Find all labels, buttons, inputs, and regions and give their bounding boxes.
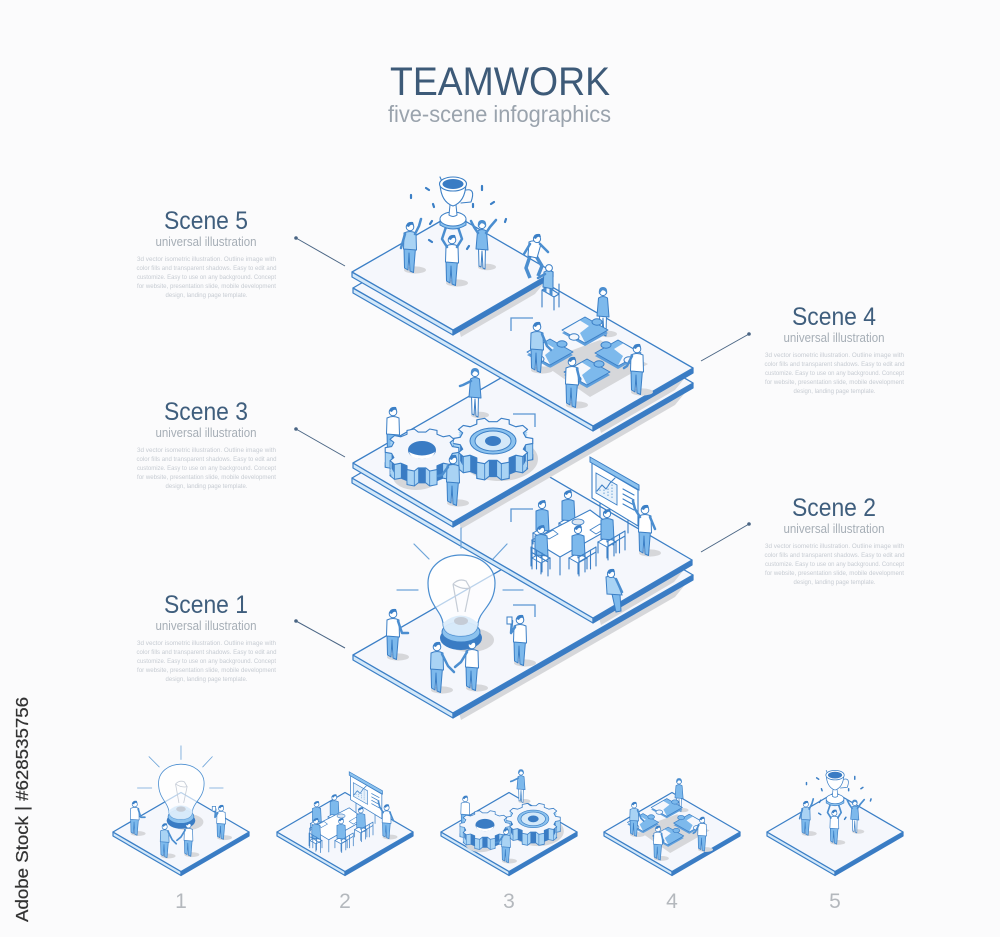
platform: scene 4	[353, 230, 693, 433]
mini scene 3	[441, 769, 577, 876]
person: seated right	[598, 509, 625, 560]
bracket corner: scene 4	[511, 318, 533, 331]
title: TEAMWORK	[390, 60, 610, 104]
text block: scene 3: customize. Easy to use on any background. Concept	[137, 466, 276, 472]
illustration: scene 3 gears team	[385, 368, 538, 507]
text block: scene 1: color fills and transparent shadows. Easy to edit and	[136, 650, 276, 656]
icon: trophy	[440, 177, 473, 229]
person: man in front of gears	[438, 455, 469, 507]
person: woman on chair	[538, 265, 559, 310]
person: man left	[530, 322, 553, 374]
person: seated back left	[533, 500, 551, 549]
text block: scene 1: design, landing page template.	[166, 677, 248, 683]
text block: scene 5: Scene 5	[164, 207, 248, 235]
person: man climbing	[524, 234, 548, 278]
illustration: scene 1 lightbulb team	[386, 528, 536, 694]
icon: lightbulb	[428, 555, 495, 652]
text block: scene 5: design, landing page template.	[166, 293, 248, 299]
text block: scene 5: universal illustration	[156, 235, 257, 249]
presentation board	[590, 457, 639, 533]
illustration: scene 5 trophy team	[401, 177, 506, 287]
text block: scene 5: customize. Easy to use on any background. Concept	[137, 275, 276, 281]
text block: scene 2: universal illustration	[784, 522, 885, 536]
text block: scene 2: Scene 2	[792, 494, 876, 522]
mini scene 1	[113, 746, 249, 876]
number 2: 2	[339, 890, 351, 913]
icon: small gear	[385, 429, 459, 490]
text block: scene 4: universal illustration	[784, 331, 885, 345]
text block: scene 5: for website, presentation slide, mobile development	[137, 284, 276, 290]
text block: scene 5	[136, 207, 276, 299]
text block: scene 1: customize. Easy to use on any background. Concept	[137, 659, 276, 665]
text block: scene 1	[136, 591, 276, 683]
text block: scene 2: for website, presentation slide, mobile development	[765, 571, 904, 577]
puzzle piece: right	[595, 340, 641, 369]
text block: scene 4: customize. Easy to use on any background. Concept	[765, 371, 904, 377]
text block: scene 3	[136, 398, 276, 490]
text block: scene 3: 3d vector isometric illustration. Outline image with	[137, 448, 276, 454]
person: man with tablet	[386, 609, 409, 661]
person: seated front left	[531, 525, 550, 576]
text block: scene 5: color fills and transparent shadows. Easy to edit and	[136, 266, 276, 272]
text block: scene 4: color fills and transparent shadows. Easy to edit and	[764, 362, 904, 368]
puzzle piece: top	[562, 317, 608, 346]
text block: scene 5: 3d vector isometric illustration. Outline image with	[137, 257, 276, 263]
number 4: 4	[666, 890, 678, 913]
leader line: scene 3	[294, 427, 345, 457]
illustration: scene 2 meeting	[531, 457, 661, 576]
text block: scene 2: design, landing page template.	[794, 580, 876, 586]
mini scene 5	[767, 770, 903, 876]
platform: scene 1	[353, 517, 693, 720]
person: seated back centre	[559, 490, 577, 539]
text block: scene 3: universal illustration	[156, 426, 257, 440]
person: woman cheering	[471, 220, 496, 270]
side credit: Adobe Stock | #628535756	[12, 697, 32, 922]
leader line: scene 1	[294, 619, 345, 648]
person: seated front right	[569, 525, 596, 576]
person: man behind small gear	[386, 407, 409, 459]
bracket corner: scene 1	[513, 605, 535, 617]
person: man with phone	[507, 615, 536, 667]
number 5: 5	[829, 890, 841, 913]
person: woman behind gears	[460, 368, 489, 418]
text block: scene 1: for website, presentation slide, mobile development	[137, 668, 276, 674]
number 3: 3	[503, 890, 515, 913]
text block: scene 4: Scene 4	[792, 303, 876, 331]
person: man left cheering	[401, 219, 426, 274]
text block: scene 2	[764, 494, 904, 586]
subtitle: five-scene infographics	[388, 101, 611, 127]
text block: scene 4: design, landing page template.	[794, 389, 876, 395]
leader line: scene 4	[701, 332, 751, 361]
text block: scene 3: for website, presentation slide, mobile development	[137, 475, 276, 481]
person: man lifting trophy	[442, 227, 468, 287]
icon: bulb rays	[397, 528, 523, 590]
number 1: 1	[175, 890, 187, 913]
puzzle shadow	[540, 340, 648, 397]
leader line: scene 5	[294, 236, 345, 266]
text block: scene 4	[764, 303, 904, 395]
person: man talking right	[455, 640, 488, 692]
text block: scene 2: 3d vector isometric illustration. Outline image with	[765, 544, 904, 550]
text block: scene 3: design, landing page template.	[166, 484, 248, 490]
bracket corner: scene 3	[513, 414, 535, 427]
platform: scene 5	[352, 214, 553, 337]
text block: scene 1: Scene 1	[164, 591, 248, 619]
person: man front	[566, 357, 588, 409]
text block: scene 4: for website, presentation slide, mobile development	[765, 380, 904, 386]
illustration: scene 4 puzzle team	[527, 287, 653, 409]
puzzle piece: bottom	[564, 359, 610, 388]
puzzle piece: left	[527, 339, 573, 368]
person: man right	[624, 344, 653, 396]
text block: scene 2: color fills and transparent shadows. Easy to edit and	[764, 553, 904, 559]
text block: scene 1: 3d vector isometric illustration. Outline image with	[137, 641, 276, 647]
text block: scene 3: color fills and transparent shadows. Easy to edit and	[136, 457, 276, 463]
leader line: scene 2	[701, 522, 751, 552]
confetti	[411, 186, 506, 249]
meeting table	[532, 510, 613, 575]
person: woman behind puzzle	[597, 287, 617, 337]
text block: scene 4: 3d vector isometric illustration. Outline image with	[765, 353, 904, 359]
platform: scene 2	[352, 420, 692, 625]
mini scene 2	[277, 772, 413, 876]
person: presenter	[633, 501, 661, 557]
person: man talking left	[430, 642, 454, 694]
platform: scene 3	[353, 325, 693, 529]
text block: scene 3: Scene 3	[164, 398, 248, 426]
text block: scene 2: customize. Easy to use on any background. Concept	[765, 562, 904, 568]
person: man sitting on platform edge	[606, 569, 622, 612]
bracket corner: scene 2	[511, 509, 533, 522]
icon: large gear	[453, 418, 538, 481]
mini scene 4	[604, 778, 740, 876]
text block: scene 1: universal illustration	[156, 619, 257, 633]
